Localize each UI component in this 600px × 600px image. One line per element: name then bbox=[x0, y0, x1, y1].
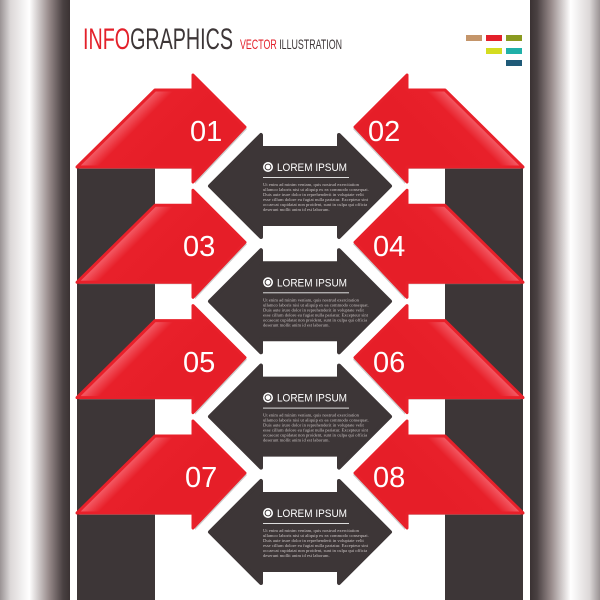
color swatches bbox=[466, 35, 522, 66]
left red arrows bbox=[77, 75, 247, 530]
center dark arrows: ullamco laboris nisi ut aliquip ex ea commodo consequat. bbox=[263, 187, 369, 192]
numbers: 04 bbox=[373, 231, 405, 263]
numbers: 02 bbox=[368, 116, 400, 148]
numbers: 08 bbox=[373, 462, 405, 494]
title: INFOGRAPHICS bbox=[83, 23, 233, 56]
right pillar bbox=[530, 0, 600, 600]
numbers bbox=[183, 116, 405, 494]
center dark arrows: Duis aute irure dolor in reprehenderit in voluptate velit bbox=[263, 192, 364, 197]
right dark column bbox=[445, 167, 523, 600]
numbers: 01 bbox=[190, 116, 222, 148]
center dark arrows: deserunt mollit anim id est laborum. bbox=[263, 207, 330, 212]
left pillar bbox=[0, 0, 70, 600]
numbers: 07 bbox=[185, 462, 217, 494]
center dark arrows: Ut enim ad minim veniam, quis nostrud exercitation bbox=[263, 182, 360, 188]
title: VECTOR ILLUSTRATION bbox=[240, 36, 342, 52]
center dark arrows: occaecat cupidatat non proident, sunt in culpa qui officia bbox=[263, 202, 367, 208]
numbers: 06 bbox=[373, 347, 405, 379]
numbers: 05 bbox=[183, 347, 215, 379]
right red arrows bbox=[353, 75, 523, 530]
center dark arrows: esse cillum dolore eu fugiat nulla pariatur. Excepteur sint bbox=[263, 197, 369, 202]
numbers: 03 bbox=[183, 231, 215, 263]
left dark column bbox=[77, 167, 155, 600]
center dark arrows bbox=[210, 135, 390, 583]
center dark arrows: LOREM IPSUM bbox=[277, 162, 347, 174]
